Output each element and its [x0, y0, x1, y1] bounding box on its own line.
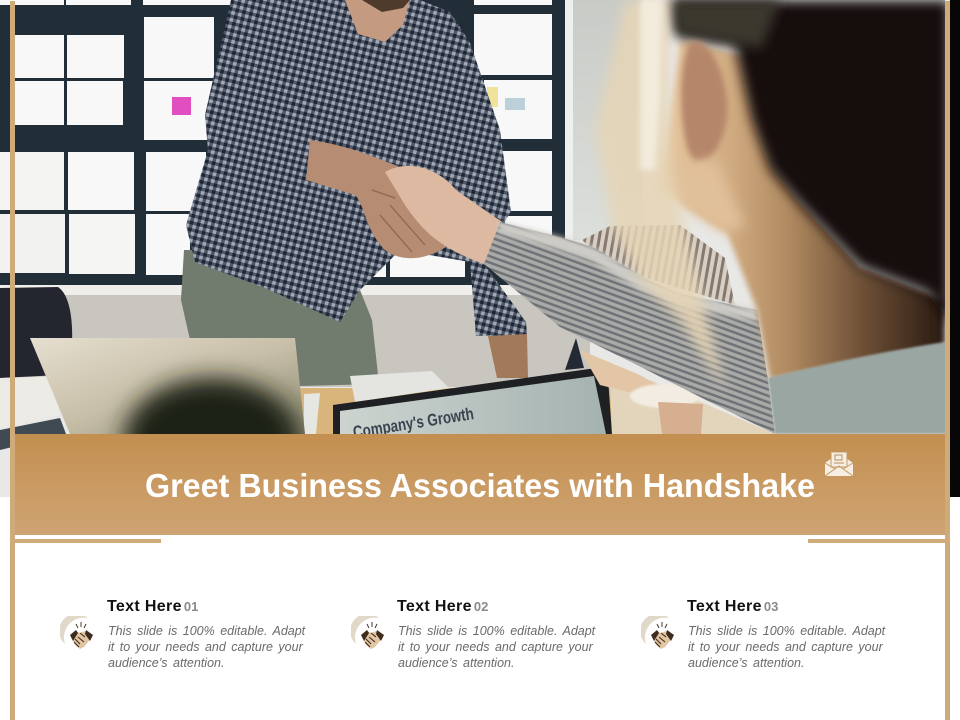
heading: Greet Business Associates with Handshake: [145, 467, 815, 504]
description 03: it to your needs and capture your: [688, 640, 883, 654]
icon: handshake badge 02: [351, 616, 384, 649]
description 01: it to your needs and capture your: [108, 640, 303, 654]
window panes: [0, 0, 552, 277]
laptop screen headline: Company's Growth: [352, 404, 475, 442]
right vertical gold rule: [945, 1, 950, 720]
man in checked shirt: [181, 0, 528, 386]
chair and laptops on desk: [0, 287, 612, 450]
description 03: audience’s attention.: [688, 656, 804, 670]
icon: envelope with letter: [825, 452, 853, 476]
description 02: This slide is 100% editable. Adapt: [398, 624, 595, 638]
description 01: This slide is 100% editable. Adapt: [108, 624, 305, 638]
photo: two colleagues shaking hands in an office: [0, 0, 960, 497]
description 01: [108, 624, 306, 670]
heading 01: Text Here01: [107, 598, 198, 615]
description 03: This slide is 100% editable. Adapt: [688, 624, 885, 638]
clasped hands: [306, 140, 502, 264]
right accent bar: [808, 539, 945, 543]
text item 02: [351, 598, 596, 670]
text item 03: [641, 598, 886, 670]
office background: [0, 0, 960, 497]
description 01: audience’s attention.: [108, 656, 224, 670]
desk items and coffee cup: [565, 338, 775, 434]
description 02: it to your needs and capture your: [398, 640, 593, 654]
heading 02: Text Here02: [397, 598, 488, 615]
woman's outstretched arm in grey sweater: [484, 222, 775, 434]
icon: handshake badge 01: [60, 616, 93, 649]
title banner: [15, 434, 945, 535]
woman's head and blonde hair: [595, 0, 960, 497]
description 02: [398, 624, 596, 670]
heading 03: Text Here03: [687, 598, 778, 615]
text item 01: [60, 598, 306, 670]
description 02: audience’s attention.: [398, 656, 514, 670]
seated person in striped blouse: [582, 225, 735, 305]
sticky notes: [172, 87, 525, 115]
left vertical gold rule: [10, 1, 15, 720]
description 03: [688, 624, 886, 670]
left accent bar: [15, 539, 161, 543]
icon: handshake badge 03: [641, 616, 674, 649]
